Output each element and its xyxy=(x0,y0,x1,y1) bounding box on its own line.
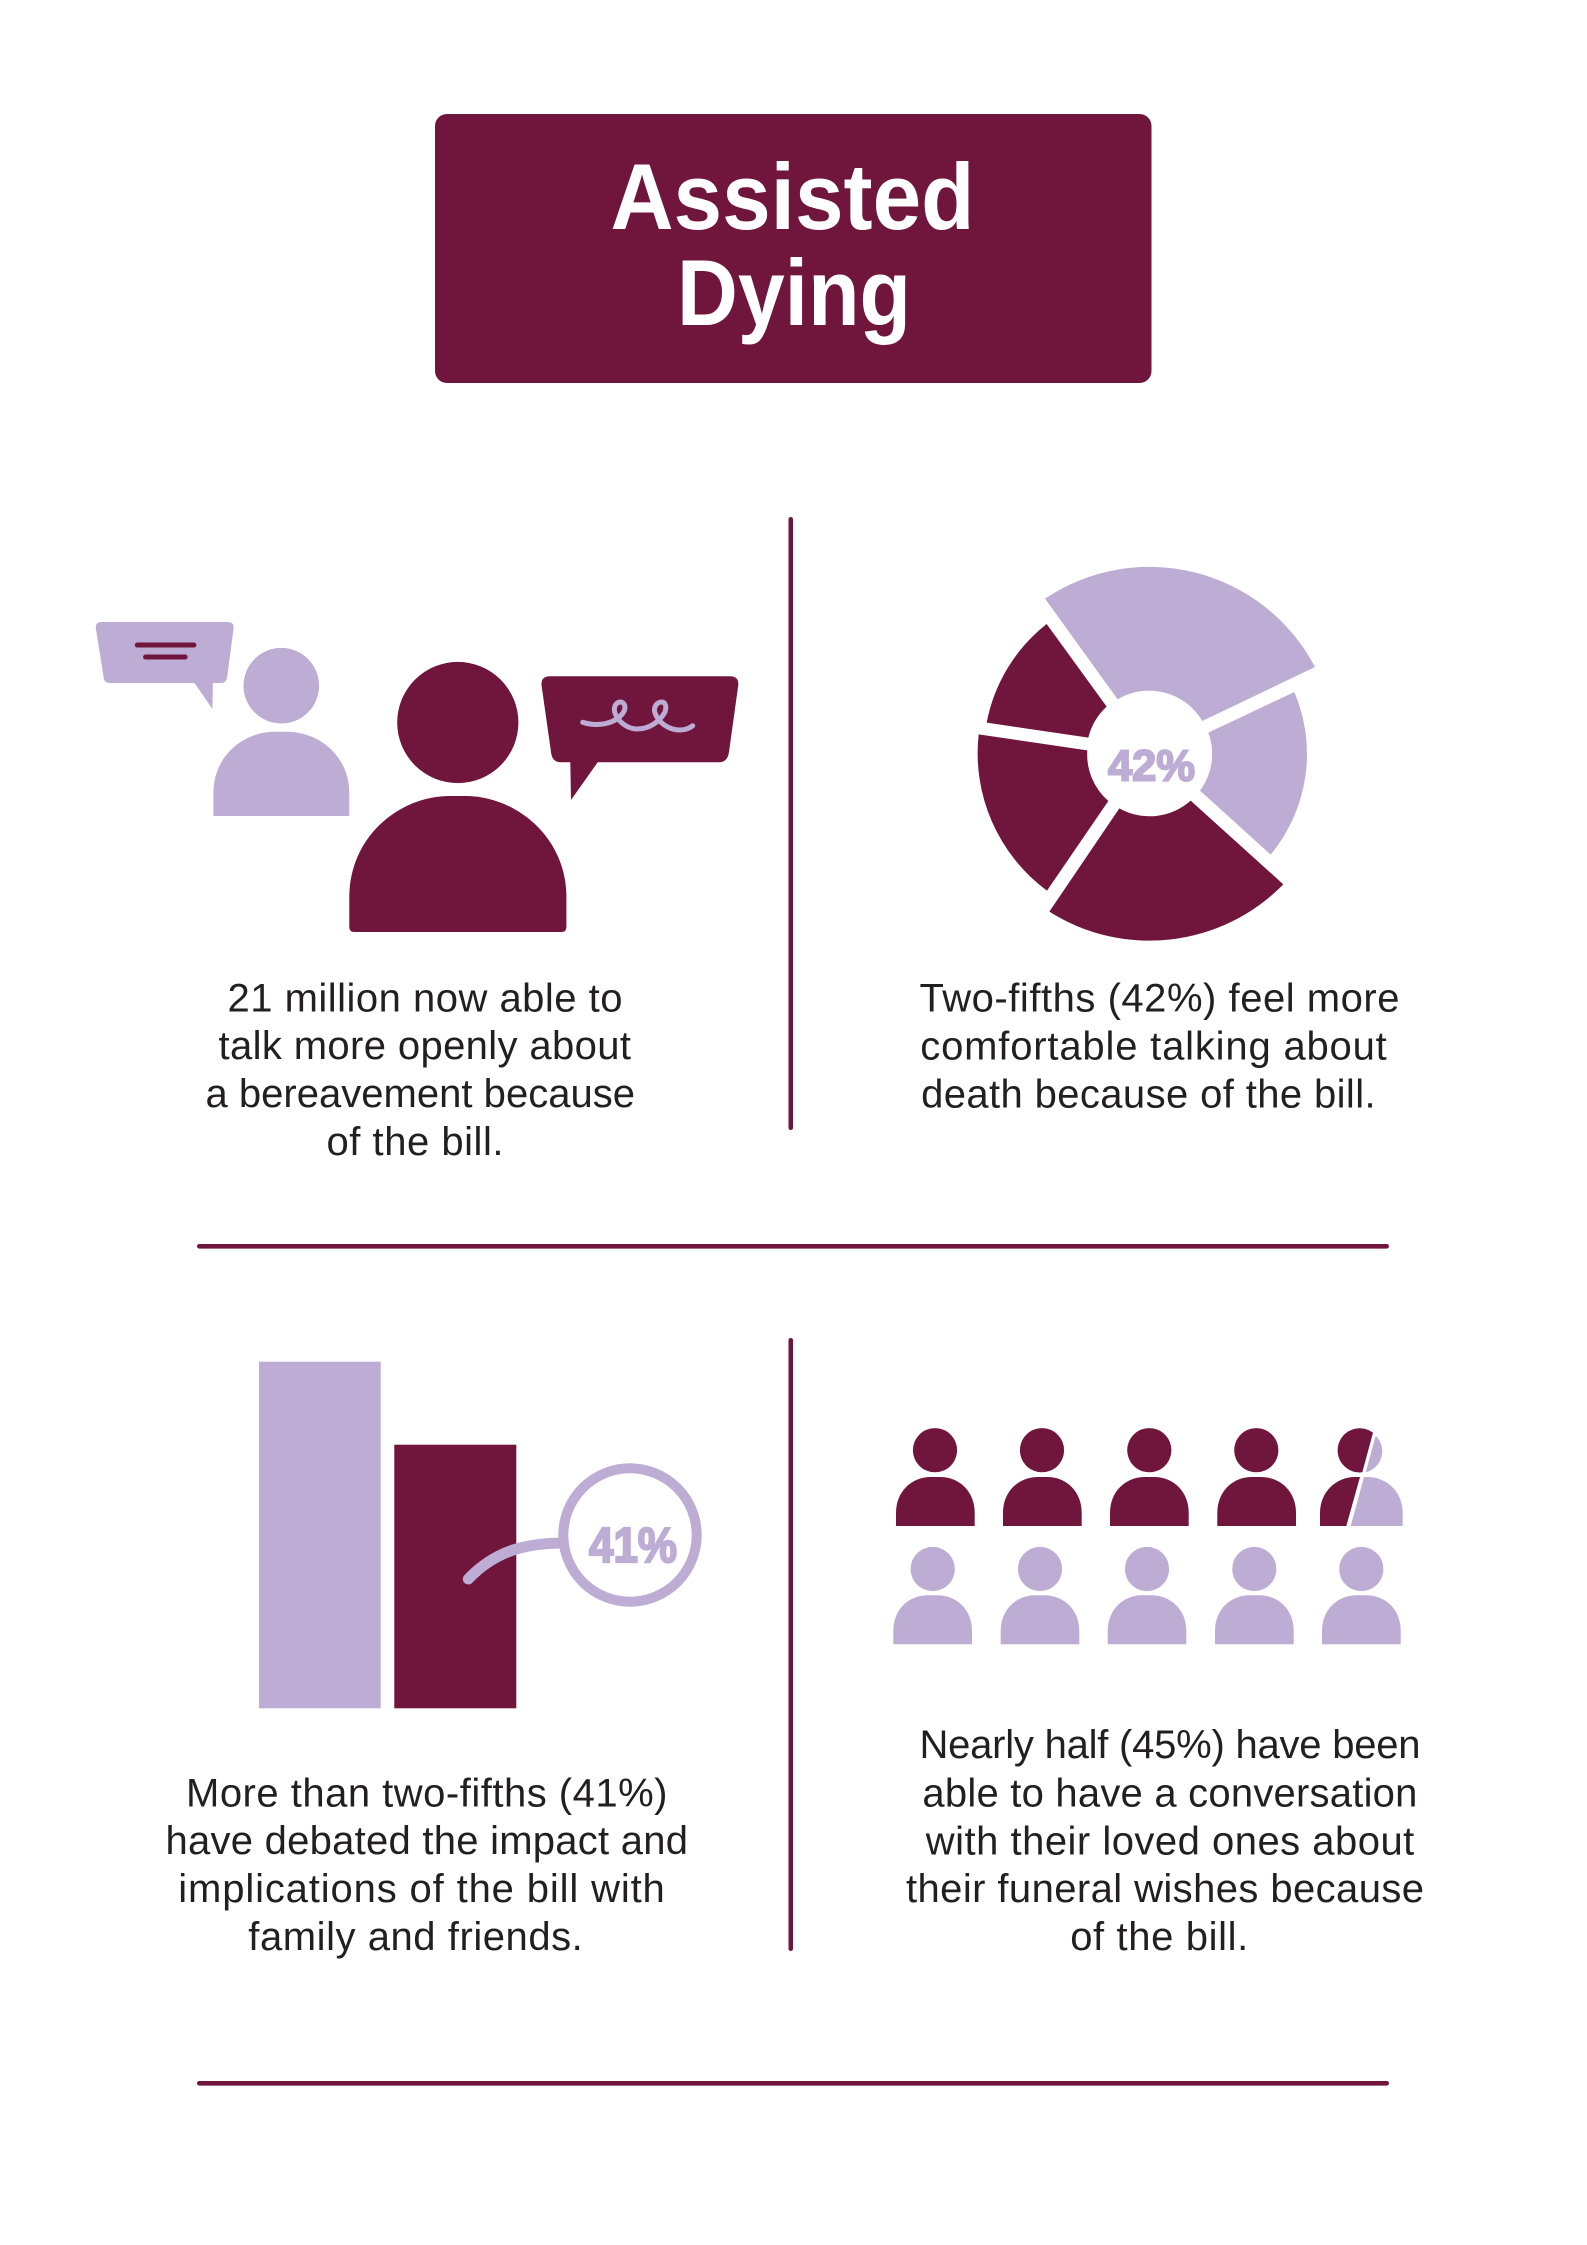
text block: debated the impact xyxy=(166,1772,688,1959)
text block: bereavement: 21 million now able to xyxy=(228,976,622,1020)
row: dark people xyxy=(896,1428,1296,1526)
text block: comfortable talking about death xyxy=(920,976,1400,1116)
icon: large speech bubble xyxy=(541,676,738,800)
text block: funeral wishes: Nearly half (45%) have been xyxy=(920,1723,1420,1767)
title banner: Assisted xyxy=(610,144,974,249)
icon: split person xyxy=(1320,1428,1403,1526)
title banner xyxy=(435,114,1152,383)
text block: comfortable talking about death: comfortable talking about xyxy=(920,1024,1387,1068)
text block: debated the impact: More than two-fifths (41%) xyxy=(186,1772,668,1816)
text block: funeral wishes: able to have a conversation xyxy=(922,1772,1417,1816)
text block: bereavement: of the bill. xyxy=(326,1120,504,1164)
chart: donut pie 42%: 42% xyxy=(1108,742,1195,791)
text block: debated the impact: family and friends. xyxy=(248,1915,583,1959)
text block: bereavement: a bereavement because xyxy=(206,1072,635,1116)
text block: funeral wishes xyxy=(906,1723,1424,1959)
text block: comfortable talking about death: death because of the bill. xyxy=(921,1072,1376,1116)
icon: small speech bubble xyxy=(96,622,234,709)
callout: 41%: 41% xyxy=(589,1519,677,1573)
text block: funeral wishes: their funeral wishes because xyxy=(906,1867,1424,1911)
title banner: Dying xyxy=(677,240,911,345)
icon: two people talking with speech bubbles xyxy=(96,622,738,932)
text block: debated the impact: have debated the impact and xyxy=(166,1819,688,1863)
text block: funeral wishes: of the bill. xyxy=(1070,1915,1248,1959)
text block: funeral wishes: with their loved ones about xyxy=(925,1820,1414,1864)
icon: large person xyxy=(349,662,566,932)
icon: small person xyxy=(213,648,349,816)
bar: light xyxy=(259,1362,381,1708)
text block: bereavement xyxy=(206,976,635,1164)
chart: two bars with 41% callout xyxy=(259,1362,697,1708)
callout: 41% xyxy=(468,1468,697,1602)
text block: bereavement: talk more openly about xyxy=(218,1024,631,1068)
bar: dark xyxy=(394,1445,516,1708)
text block: comfortable talking about death: Two-fifths (42%) feel more xyxy=(920,976,1400,1020)
text block: debated the impact: implications of the bill with xyxy=(178,1867,665,1911)
row: light people xyxy=(893,1547,1401,1644)
chart: pictogram of ten people, 45% xyxy=(893,1428,1403,1644)
chart: donut pie 42% xyxy=(978,567,1315,941)
